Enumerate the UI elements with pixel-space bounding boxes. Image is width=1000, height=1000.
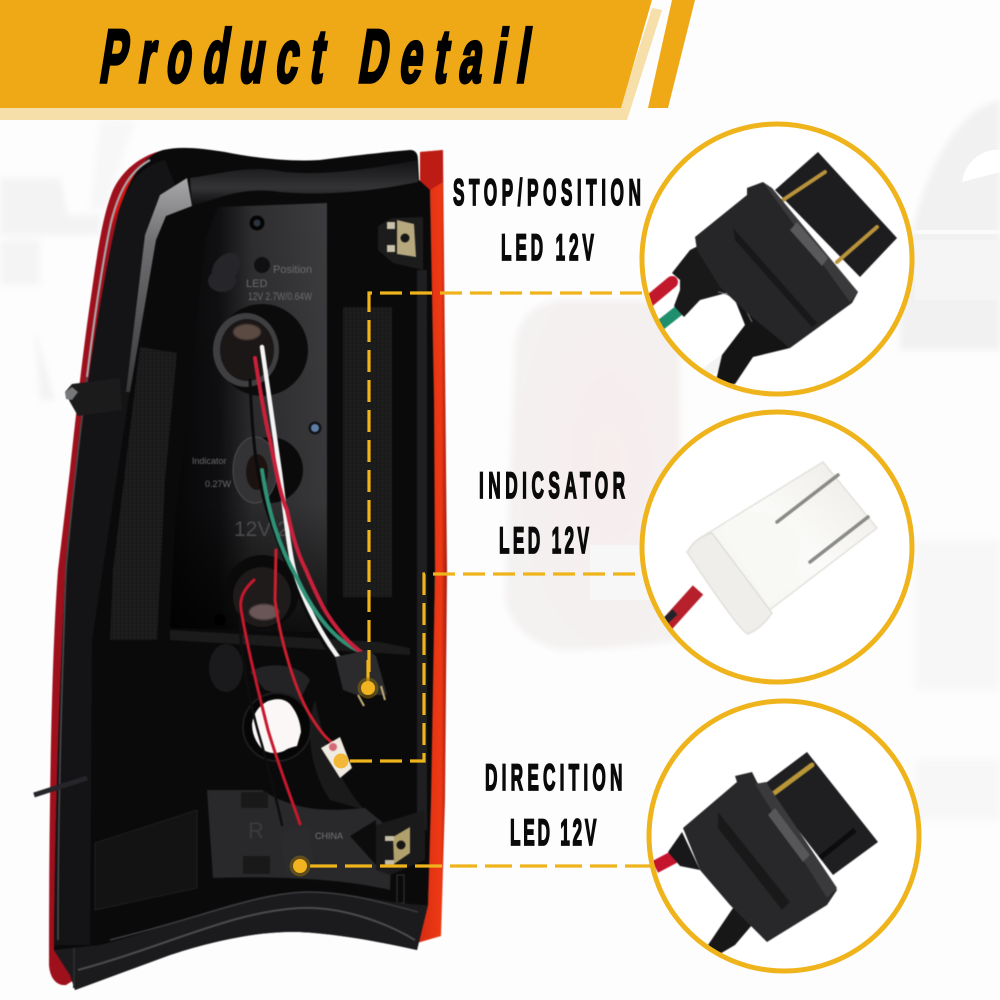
label: stop/position: LED 12V	[501, 228, 594, 269]
lower tray: CHINA	[315, 831, 343, 841]
embossed labels: 12V 2.7W/0.64W	[248, 291, 312, 303]
rubber grommet	[206, 247, 270, 292]
wiring harness	[240, 347, 364, 825]
red lens right strip	[417, 150, 447, 943]
lower tray	[95, 790, 392, 910]
right speckled panel	[343, 307, 392, 597]
embossed labels: Indicator	[192, 456, 227, 466]
label: stop/position	[453, 173, 641, 269]
callout circle: indicator bulb	[642, 412, 912, 682]
embossed labels: 0.27W	[205, 479, 232, 489]
callout circle: stop/position connector	[642, 124, 912, 394]
top bracket	[378, 217, 423, 270]
label: indicator	[479, 466, 625, 562]
inner highlight	[126, 178, 192, 392]
embossed labels: Position	[273, 264, 312, 276]
connector: indicator bulb	[321, 737, 352, 778]
connector: direction	[280, 825, 314, 878]
header banner	[0, 0, 695, 120]
side clip tab	[65, 378, 122, 416]
silver edge line	[87, 160, 150, 377]
tail light photo	[34, 148, 447, 990]
red lens top shade	[420, 150, 443, 190]
label: stop/position: STOP/POSITION	[453, 173, 641, 214]
dashed leader: direction	[290, 856, 652, 876]
dashed leader: indicator	[334, 574, 642, 768]
lower lamp recess	[209, 644, 365, 810]
label: indicator: INDICSATOR	[479, 466, 625, 507]
dashed leader: stop/position	[358, 293, 650, 698]
lower tray: R	[248, 818, 264, 843]
screws	[250, 216, 322, 434]
embossed labels: 12V 2	[234, 518, 289, 541]
label: direction: DIRECITION	[485, 758, 623, 799]
side pin	[34, 778, 87, 795]
right channel	[417, 270, 427, 830]
left speckled panel	[110, 347, 177, 640]
label: indicator: LED 12V	[499, 521, 589, 562]
bottom bracket	[376, 810, 425, 903]
title: Product Detail	[95, 14, 537, 98]
red lens left edge	[49, 151, 160, 985]
embossed labels	[192, 264, 312, 541]
label: direction	[485, 758, 623, 854]
bottom rim	[54, 892, 428, 990]
lower edge line	[58, 377, 87, 940]
top lip highlight	[190, 160, 418, 206]
label: direction: LED 12V	[510, 813, 597, 854]
callout circle: direction connector	[649, 701, 919, 971]
red lens highlight	[104, 155, 157, 250]
wire holes	[213, 304, 308, 629]
embossed labels: LED	[246, 278, 267, 290]
left body band	[54, 160, 175, 945]
connector: stop/position	[335, 650, 387, 706]
mounting plate	[170, 203, 410, 655]
black housing	[54, 148, 435, 990]
